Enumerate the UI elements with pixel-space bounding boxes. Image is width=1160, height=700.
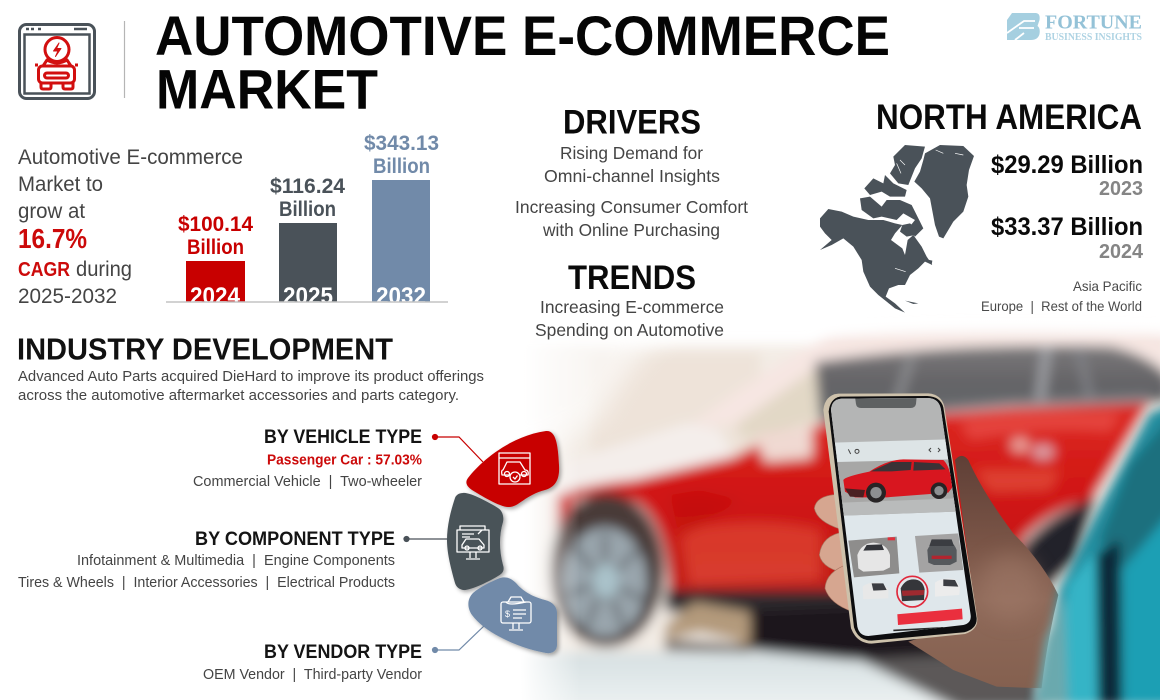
north america stats: $33.37 Billion — [991, 213, 1143, 241]
trends: TRENDS — [568, 259, 696, 297]
logo: Fortune Business Insights — [1007, 12, 1142, 43]
palm highlight — [980, 553, 1040, 620]
bar: 2032: 2032 — [376, 283, 426, 310]
segment: by component type: Infotainment & Multimedia | Engine Components — [77, 553, 395, 569]
bar: 2024: Billion — [187, 236, 244, 259]
logo: Fortune Business Insights: BUSINESS INSIGHTS — [1045, 32, 1142, 43]
icon: monitor with car and price: $ — [505, 609, 510, 619]
drivers: with Online Purchasing — [542, 220, 720, 240]
bar: 2032 — [364, 131, 439, 310]
bar: 2025: Billion — [279, 198, 336, 221]
petal: component type — [447, 493, 504, 590]
thumbnail cars — [857, 539, 960, 607]
white fade overlays — [500, 320, 580, 700]
text: CAGR summary: grow at — [18, 199, 85, 223]
text: CAGR summary: 2025-2032 — [18, 284, 117, 308]
phone frame — [823, 393, 977, 644]
industry development — [17, 332, 484, 404]
segment: by component type: Tires & Wheels | Interior Accessories | Electrical Products — [18, 575, 395, 591]
text: CAGR summary: 16.7% — [18, 223, 87, 254]
bar: 2025: 2025 — [283, 283, 333, 310]
drivers: Increasing Consumer Comfort — [515, 197, 748, 217]
title: AUTOMOTIVE E-COMMERCE — [155, 4, 890, 67]
trends: Increasing E-commerce — [540, 297, 724, 317]
phone screen — [831, 398, 971, 636]
industry development: INDUSTRY DEVELOPMENT — [17, 332, 393, 366]
north america stats: Asia Pacific — [1073, 278, 1142, 294]
bar: 2032: $343.13 — [364, 131, 439, 155]
bar: 2032: Billion — [373, 155, 430, 178]
segment: by vehicle type: BY VEHICLE TYPE — [264, 427, 422, 448]
segment: by vehicle type: Passenger Car : 57.03% — [267, 452, 422, 468]
connector: vehicle — [432, 434, 483, 462]
drivers — [515, 104, 748, 240]
bar: 2025: $116.24 — [270, 174, 345, 198]
tan patch — [665, 602, 750, 650]
photo: blurred teal clothing — [1033, 405, 1160, 700]
segment: by vehicle type: Commercial Vehicle | Two-wheeler — [193, 474, 422, 490]
north america stats — [876, 98, 1144, 314]
text: CAGR summary: Automotive E-commerce — [18, 145, 243, 169]
photo: blurred red car background — [500, 318, 1160, 700]
trends: Spending on Automotive — [535, 320, 724, 340]
segment: by vendor type: OEM Vendor | Third-party Vendor — [203, 667, 422, 683]
drivers: Omni-channel Insights — [544, 166, 720, 186]
product car — [843, 459, 952, 503]
hand and thumb — [908, 456, 1058, 688]
segment: by vendor type — [203, 642, 422, 683]
north america stats: 2023 — [1099, 178, 1143, 200]
photo: hand holding phone — [814, 393, 1058, 688]
trends — [535, 259, 724, 340]
divider — [124, 21, 126, 98]
bar: 2025 — [270, 174, 345, 310]
industry development: Advanced Auto Parts acquired DieHard to improve its product offerings — [18, 368, 484, 385]
drivers: Rising Demand for — [560, 143, 703, 163]
bar: 2024: $100.14 — [178, 212, 253, 236]
connector: vendor — [432, 625, 485, 652]
bar: 2024: 2024 — [190, 283, 241, 310]
hood — [556, 423, 733, 496]
text: CAGR summary: during — [76, 257, 132, 281]
front wheel — [548, 493, 664, 647]
north america stats: 2024 — [1099, 241, 1144, 263]
icon: browser window with car — [20, 24, 94, 98]
segment: by component type: BY COMPONENT TYPE — [195, 529, 395, 550]
segment: by component type — [18, 529, 395, 591]
icon: car in browser — [499, 453, 530, 484]
bar: 2024 — [178, 215, 253, 302]
title: MARKET — [156, 58, 378, 120]
logo: Fortune Business Insights: FORTUNE — [1045, 12, 1142, 34]
roof and pillar — [690, 328, 1160, 425]
under car — [665, 590, 1015, 612]
map: North America — [820, 145, 974, 313]
text: CAGR summary: CAGR — [18, 258, 70, 281]
connector: component — [404, 536, 450, 542]
north america stats: Europe | Rest of the World — [981, 298, 1142, 314]
drivers: DRIVERS — [563, 104, 701, 142]
body — [555, 403, 1150, 592]
fingers — [814, 494, 853, 612]
text: CAGR summary: Market to — [18, 172, 103, 196]
icon: monitor with car — [457, 526, 489, 559]
bar chart — [166, 131, 448, 310]
title — [155, 4, 890, 120]
petal: vendor type — [468, 577, 557, 653]
segment: by vendor type: BY VENDOR TYPE — [264, 642, 422, 663]
segment: by vehicle type — [193, 427, 422, 490]
petal: vehicle type — [466, 431, 559, 507]
text: CAGR summary — [18, 145, 243, 308]
north america stats: $29.29 Billion — [991, 151, 1143, 179]
industry development: across the automotive aftermarket accessories and parts category. — [18, 387, 459, 404]
